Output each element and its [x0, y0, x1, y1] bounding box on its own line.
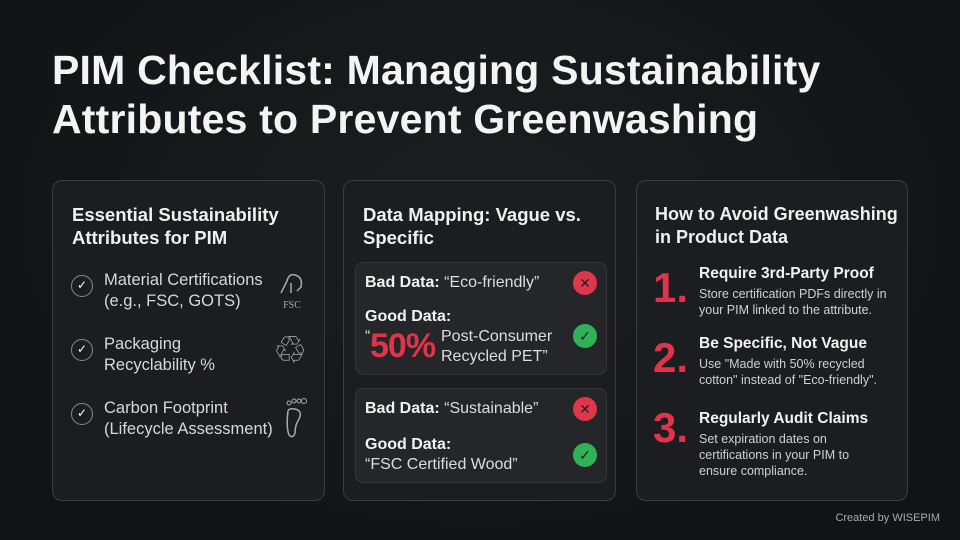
step 2 — [653, 334, 877, 387]
bad data sustainable: Bad Data: “Sustainable” — [365, 400, 538, 417]
title: PIM Checklist: Managing Sustainability — [52, 47, 821, 93]
heading: essential attributes: Essential Sustainability — [72, 204, 279, 225]
panel: essential attributes — [52, 180, 325, 501]
panel: avoid greenwashing: Set expiration dates on certifications in your PIM to ensure compliance. — [699, 432, 849, 478]
panel: avoid greenwashing: Store certification PDFs directly in your PIM linked to the attribute. — [699, 287, 887, 317]
panel: avoid greenwashing: Use "Made with 50% recycled cotton" instead of "Eco-friendly". — [699, 357, 877, 387]
icon: red x: ✕ — [579, 275, 591, 291]
heading: avoid greenwashing: in Product Data — [655, 227, 788, 247]
good data fsc: Good Data: — [365, 436, 451, 453]
good data fsc: “FSC Certified Wood” — [365, 456, 518, 473]
item: packaging: Recyclability % — [104, 356, 215, 374]
heading: data mapping: Data Mapping: Vague vs. — [363, 204, 581, 225]
item: material certifications: Material Certifications — [104, 271, 263, 289]
box: eco-friendly example — [355, 262, 607, 375]
icon: recycle: ♲ — [273, 330, 307, 372]
good data 50%: 50% — [370, 327, 435, 365]
panel: avoid greenwashing: 2. — [653, 334, 688, 381]
panel: data mapping — [343, 180, 616, 501]
heading: avoid greenwashing: How to Avoid Greenwashing — [655, 204, 898, 224]
good data 50%: Good Data: — [365, 308, 451, 325]
item: packaging — [71, 335, 215, 374]
panel: avoid greenwashing: Require 3rd-Party Proof — [699, 265, 874, 282]
good data 50%: Recycled PET” — [441, 348, 548, 365]
heading: avoid greenwashing — [655, 204, 898, 247]
icon: red x: ✕ — [579, 401, 591, 417]
icon: green check — [573, 324, 597, 348]
item: carbon footprint — [71, 399, 273, 438]
icon: red x — [573, 271, 597, 295]
panel: avoid greenwashing: Be Specific, Not Vague — [699, 335, 867, 352]
icon: FSC tree: FSC — [283, 300, 301, 311]
heading: essential attributes — [72, 204, 279, 248]
box: sustainable example — [355, 388, 607, 483]
item: material certifications — [71, 271, 263, 310]
heading: data mapping — [363, 204, 581, 248]
step 3 — [653, 404, 868, 478]
title: Attributes to Prevent Greenwashing — [52, 96, 758, 142]
item: carbon footprint: Carbon Footprint — [104, 399, 228, 417]
item: carbon footprint: ✓ — [77, 406, 87, 420]
item: packaging: ✓ — [77, 342, 87, 356]
footer credit: Created by WISEPIM — [835, 512, 940, 524]
icon: green check: ✓ — [579, 447, 591, 463]
panel: avoid greenwashing: 3. — [653, 404, 688, 451]
step 1 — [653, 264, 887, 317]
good data fsc — [365, 436, 518, 473]
title — [52, 47, 821, 142]
good data 50%: Post-Consumer — [441, 328, 552, 345]
bad data eco-friendly: Bad Data: “Eco-friendly” — [365, 274, 539, 291]
good data 50% — [365, 308, 552, 365]
icon: FSC tree — [280, 274, 302, 311]
icon: footprint — [286, 398, 307, 438]
panel: avoid greenwashing: 1. — [653, 264, 688, 311]
heading: data mapping: Specific — [363, 227, 434, 248]
panel: avoid greenwashing — [636, 180, 908, 501]
icon: green check: ✓ — [579, 328, 591, 344]
item: material certifications: (e.g., FSC, GOTS) — [104, 292, 241, 310]
item: carbon footprint: (Lifecycle Assessment) — [104, 420, 273, 438]
icon: red x — [573, 397, 597, 421]
heading: essential attributes: Attributes for PIM — [72, 227, 227, 248]
item: material certifications: ✓ — [77, 278, 87, 292]
item: packaging: Packaging — [104, 335, 181, 353]
good data 50%: “ — [365, 328, 370, 345]
panel: avoid greenwashing: Regularly Audit Claims — [699, 410, 868, 427]
icon: green check — [573, 443, 597, 467]
